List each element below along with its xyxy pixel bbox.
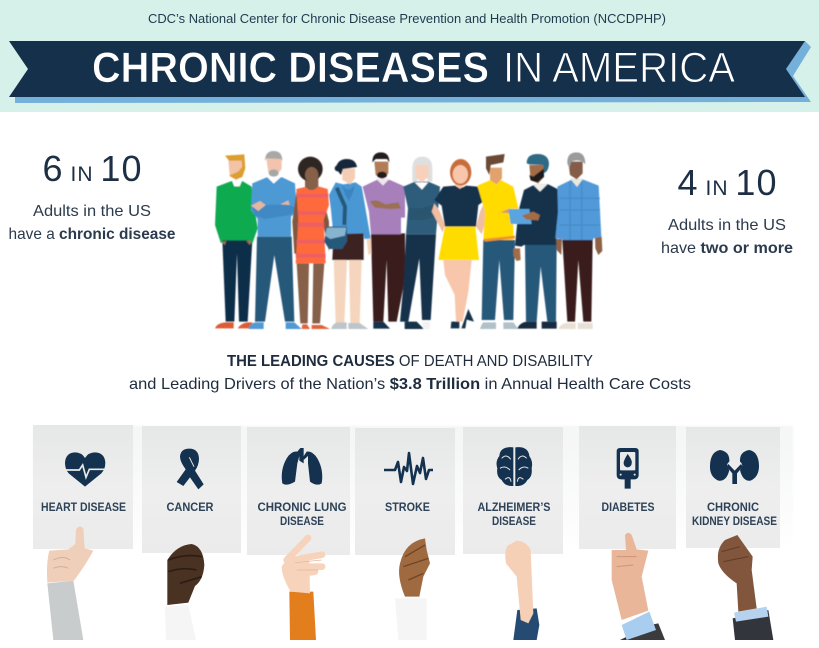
sign: cancer bbox=[142, 426, 241, 553]
title text bold part: CHRONIC DISEASES bbox=[92, 44, 489, 92]
stat: 4 in 10 bbox=[661, 162, 793, 257]
hand: grey sleeve bbox=[47, 526, 93, 640]
stat: 4 in 10: Adults in the US bbox=[668, 217, 786, 234]
stat: 4 in 10: have two or more bbox=[661, 240, 793, 257]
stat: 6 in 10 bbox=[8, 148, 176, 243]
icon: ribbon bbox=[177, 449, 204, 489]
label: STROKE bbox=[385, 502, 430, 514]
title text light part: IN AMERICA bbox=[503, 44, 735, 92]
label: ALZHEIMER’S bbox=[478, 502, 551, 514]
section heading: THE LEADING CAUSES OF DEATH AND DISABILITY bbox=[227, 353, 593, 370]
sign: stroke bbox=[355, 428, 455, 555]
section heading: and Leading Drivers of the Nation’s $3.8 Trillion in Annual Health Care Costs bbox=[129, 376, 691, 393]
icon: kidneys bbox=[710, 450, 759, 484]
stat: 4 in 10: 4 IN 10 bbox=[678, 162, 776, 203]
icon: brain bbox=[497, 447, 532, 486]
person: purple sweater bbox=[363, 152, 405, 329]
header background bbox=[0, 0, 819, 112]
sign: heart disease bbox=[33, 425, 133, 549]
person: yellow sweater bbox=[477, 154, 518, 329]
person: plaid shirt bbox=[555, 152, 602, 329]
title banner bbox=[9, 41, 811, 103]
label: CHRONIC bbox=[707, 502, 759, 514]
hand: dark with white sleeve bbox=[165, 544, 204, 640]
person: orange striped dress bbox=[292, 157, 330, 329]
person: navy top yellow skirt bbox=[432, 159, 488, 328]
sign: chronic lung disease bbox=[247, 427, 350, 555]
hand: brown fist bbox=[395, 538, 430, 640]
label: CHRONIC LUNG bbox=[258, 502, 347, 514]
group of ten people bbox=[215, 151, 602, 329]
hand: suit cuff bbox=[612, 533, 665, 640]
icon: heart bbox=[65, 452, 105, 487]
person: navy sweater turban bbox=[508, 154, 566, 329]
sign: diabetes bbox=[579, 426, 676, 549]
sign: alzheimer's disease: DISEASE bbox=[492, 516, 536, 528]
sign: chronic kidney disease: KIDNEY DISEASE bbox=[692, 516, 777, 528]
icon: pulse line bbox=[384, 453, 433, 484]
hand: orange sleeve bbox=[282, 538, 322, 640]
person: blue hoodie with bag bbox=[324, 159, 372, 329]
label: DIABETES bbox=[602, 502, 655, 514]
hands holding signs (left) bbox=[47, 526, 420, 640]
section heading bbox=[129, 353, 691, 393]
person: green sweater bbox=[215, 154, 258, 328]
sign: chronic lung disease: DISEASE bbox=[280, 516, 324, 528]
label: CANCER bbox=[166, 502, 214, 514]
stat: 6 in 10: 6 IN 10 bbox=[42, 148, 142, 189]
stat: 6 in 10: have a chronic disease bbox=[8, 226, 176, 243]
label: HEART DISEASE bbox=[41, 502, 126, 514]
stat: 6 in 10: Adults in the US bbox=[33, 203, 151, 220]
sign: alzheimer's disease bbox=[463, 427, 563, 554]
icon: glucose meter bbox=[617, 448, 639, 489]
sign: chronic kidney disease bbox=[686, 427, 780, 548]
person: white hair teal sweater bbox=[400, 157, 440, 329]
hand: dark with suit cuff bbox=[718, 535, 773, 640]
hand: brown with white sleeve bbox=[400, 597, 420, 640]
person: blue sweater grey hair bbox=[248, 151, 302, 329]
hands holding signs (right) bbox=[395, 533, 773, 640]
hand: pale with blue sleeve bbox=[505, 541, 539, 640]
organization line: CDC’s National Center for Chronic Disease Prevention and Health Promotion (NCCDPHP) bbox=[148, 12, 666, 26]
icon: lungs bbox=[282, 448, 322, 485]
signs backdrop bbox=[33, 426, 793, 554]
